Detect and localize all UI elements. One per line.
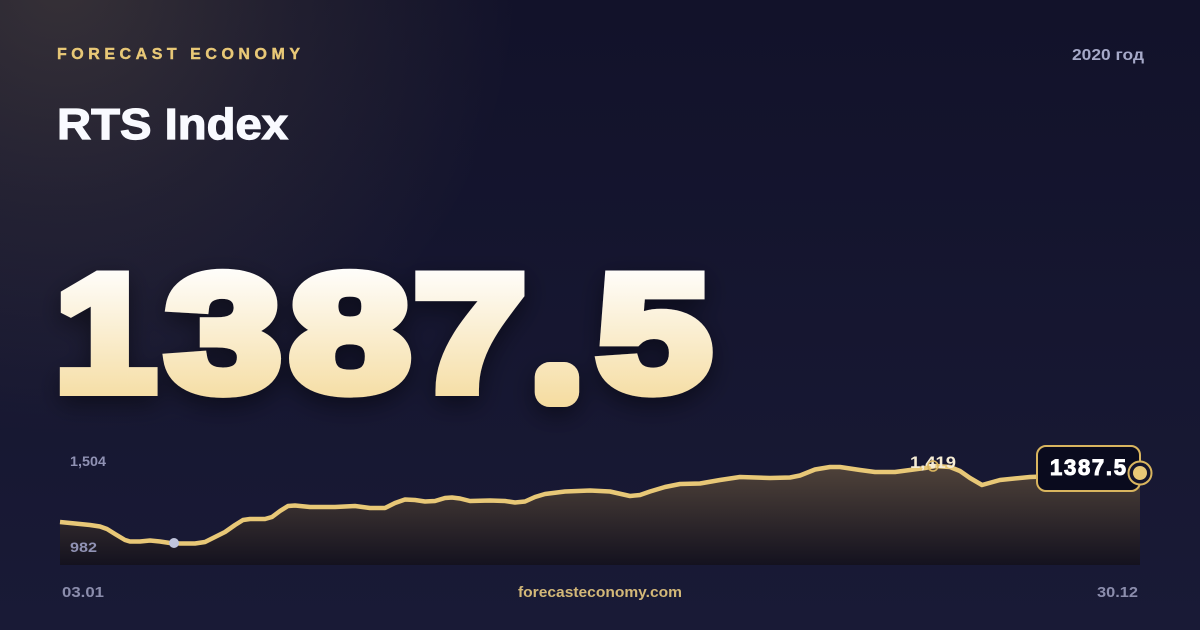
axis max label: 1,504 <box>70 453 106 469</box>
big value: . <box>543 302 571 414</box>
current value badge: 1387.5 <box>1050 455 1126 480</box>
high point marker <box>928 461 938 471</box>
high value label: 1,419 <box>910 453 956 472</box>
big value: 5 <box>597 241 711 425</box>
area chart <box>60 446 1152 565</box>
current point marker <box>1128 462 1152 484</box>
start date: 03.01 <box>62 584 104 601</box>
title: RTS Index <box>57 100 289 149</box>
big value: 1 <box>55 241 156 425</box>
chart area fill <box>60 466 1140 565</box>
big value: 8 <box>290 241 410 425</box>
brand label: FORECAST ECONOMY <box>57 46 300 63</box>
website: forecasteconomy.com <box>518 584 682 601</box>
low point marker <box>169 538 179 548</box>
year label: 2020 год <box>1072 47 1144 64</box>
big value <box>55 241 711 425</box>
big value: 7 <box>414 241 526 425</box>
current value badge <box>1037 446 1140 491</box>
big value: 3 <box>166 241 281 425</box>
end date: 30.12 <box>1097 584 1138 601</box>
chart line <box>60 466 1140 544</box>
axis min label: 982 <box>70 539 97 555</box>
